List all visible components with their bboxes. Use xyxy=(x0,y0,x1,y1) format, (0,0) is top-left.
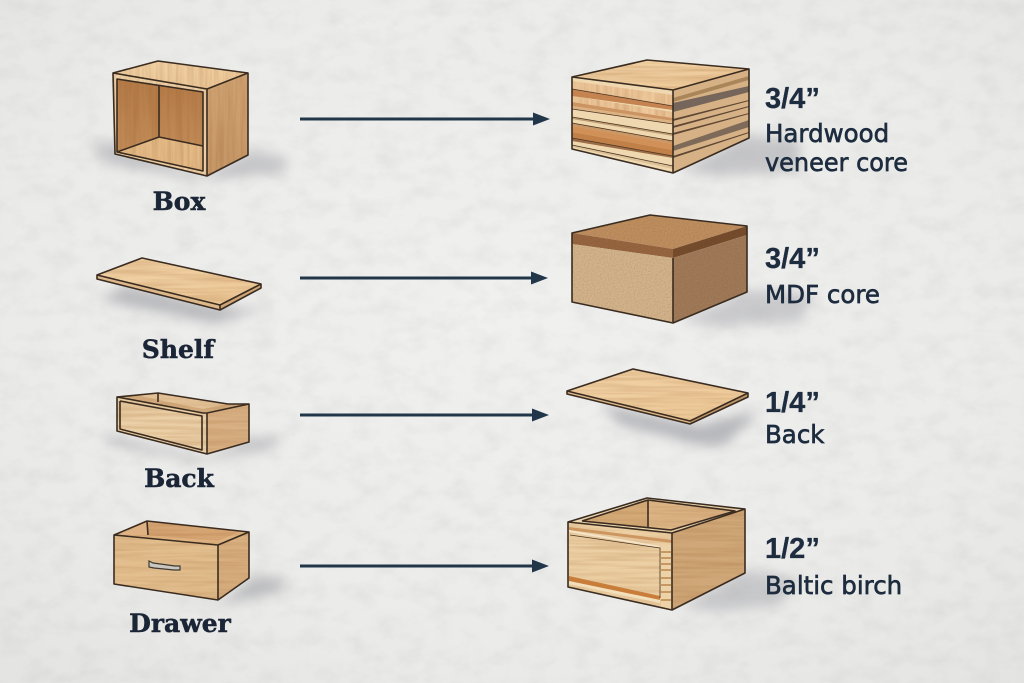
label: 1/2 inch Baltic birch: Baltic birch xyxy=(765,571,902,600)
row 4: drawer to Baltic birch xyxy=(114,498,902,638)
label: Drawer: Drawer xyxy=(129,609,232,638)
icon: drawer xyxy=(114,521,285,606)
icon: back frame xyxy=(100,393,285,462)
plywood edge stripes xyxy=(569,527,672,609)
drawer handle xyxy=(149,561,180,570)
icon: shelf board xyxy=(97,258,275,324)
row 2: shelf to MDF core xyxy=(97,215,880,364)
label: Shelf: Shelf xyxy=(142,335,216,364)
label: 3/4 inch hardwood veneer core: Hardwood xyxy=(765,119,889,148)
label: 1/4 inch back: Back xyxy=(765,420,825,449)
arrow: box to core xyxy=(300,112,550,126)
label: 3/4 inch hardwood veneer core: veneer core xyxy=(765,148,908,177)
front layers xyxy=(572,77,673,173)
icon: MDF core block xyxy=(572,215,815,326)
arrow: drawer to birch xyxy=(300,560,549,572)
label: 3/4 inch MDF core: MDF core xyxy=(765,280,880,309)
icon: box cabinet xyxy=(92,61,288,180)
label: 1/2 inch Baltic birch xyxy=(765,533,902,600)
row 3: back to quarter-inch back xyxy=(100,369,825,493)
side layers xyxy=(673,69,749,173)
label: 3/4 inch hardwood veneer core xyxy=(765,83,908,177)
label: Box: Box xyxy=(153,187,206,216)
label: 3/4 inch hardwood veneer core: 3/4” xyxy=(765,83,820,115)
arrow: back to panel xyxy=(300,408,549,422)
label: 1/4 inch back: 1/4” xyxy=(765,387,820,419)
icon: hardwood veneer core block xyxy=(572,60,800,176)
label: 3/4 inch MDF core: 3/4” xyxy=(765,243,820,275)
icon: quarter-inch back panel xyxy=(567,369,760,446)
icon: Baltic birch box xyxy=(568,498,800,612)
label: 1/2 inch Baltic birch: 1/2” xyxy=(765,533,820,565)
arrow: shelf to core xyxy=(300,272,548,284)
label: 3/4 inch MDF core xyxy=(765,243,880,309)
label: Back: Back xyxy=(144,464,215,493)
row 1: box to hardwood veneer core xyxy=(92,60,908,216)
label: 1/4 inch back xyxy=(765,387,825,449)
